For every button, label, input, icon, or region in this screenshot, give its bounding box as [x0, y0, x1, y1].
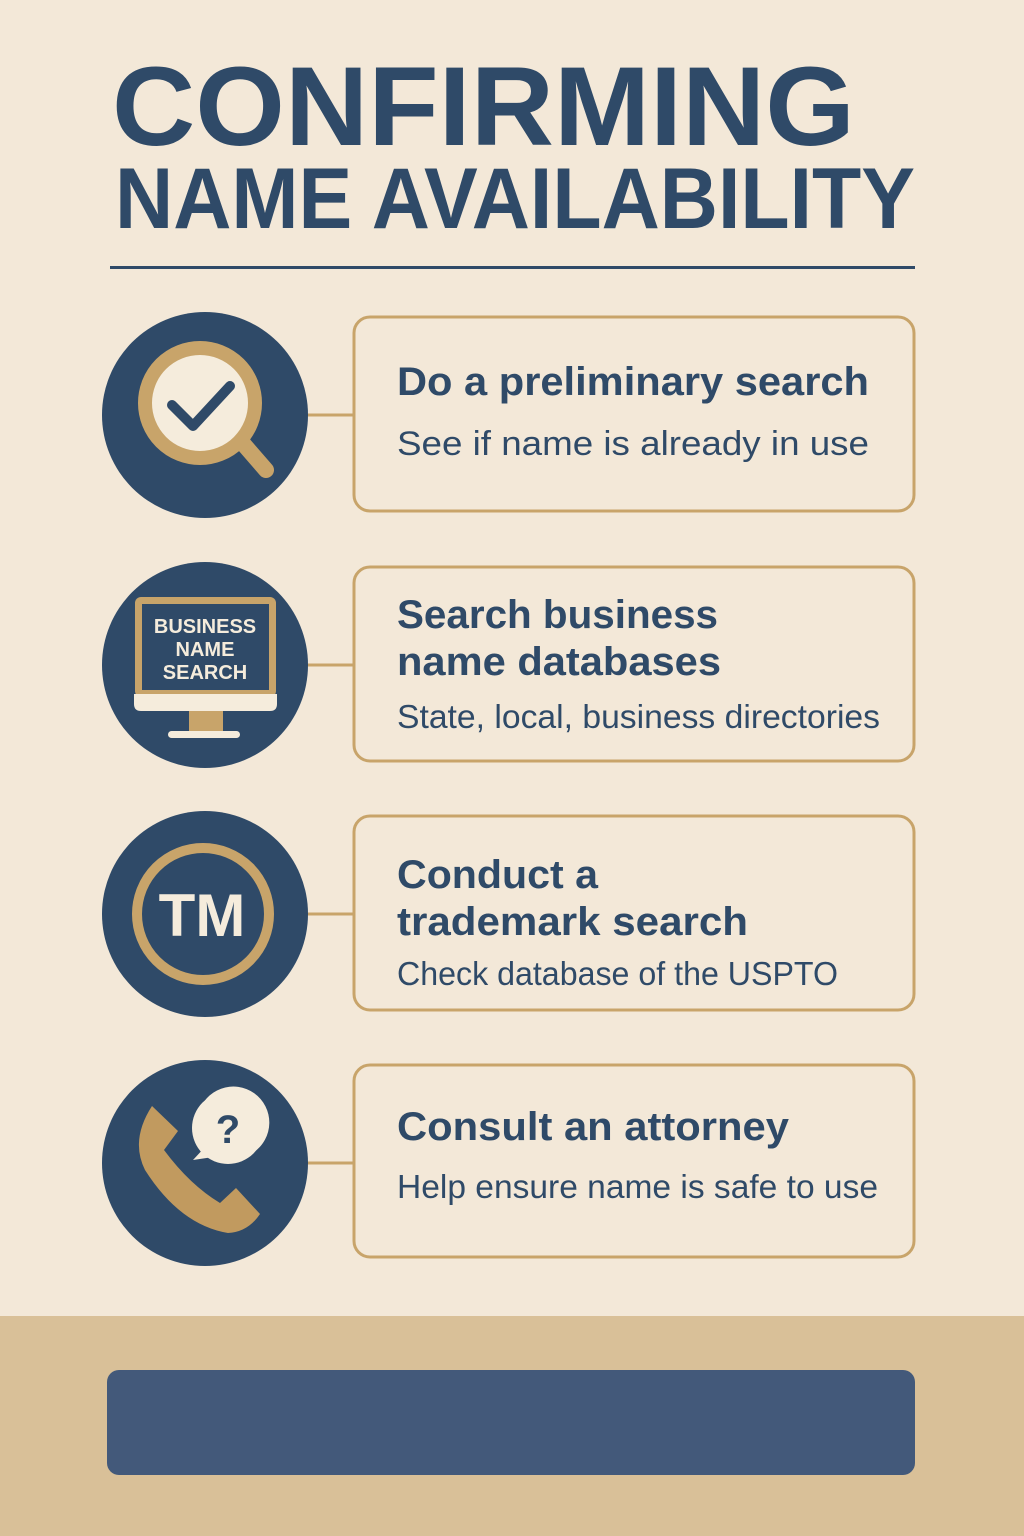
panel: trademark search: trademark search — [397, 900, 748, 944]
icon: phone with question: ? — [216, 1108, 240, 1152]
panel: trademark search: Conduct a — [397, 853, 599, 897]
panel: trademark search: Check database of the USPTO — [397, 955, 838, 992]
icon: monitor: SEARCH — [163, 662, 247, 684]
panel: trademark search — [354, 816, 914, 1010]
step 3: trademark — [102, 811, 914, 1017]
icon: phone with question — [102, 1060, 308, 1266]
panel: preliminary search: See if name is already in use — [397, 425, 869, 463]
title — [112, 44, 915, 247]
icon: TM: TM — [159, 882, 245, 949]
panel: consult attorney: Consult an attorney — [397, 1105, 790, 1149]
panel: consult attorney — [354, 1065, 914, 1257]
icon: monitor — [102, 562, 308, 768]
footer bar — [107, 1370, 915, 1475]
panel: preliminary search: Do a preliminary search — [397, 360, 869, 404]
panel: business databases: Search business — [397, 593, 718, 637]
title: NAME AVAILABILITY — [115, 151, 915, 247]
icon: TM — [102, 811, 308, 1017]
step 2: business databases — [102, 562, 914, 768]
panel: business databases — [354, 567, 914, 761]
panel: preliminary search — [354, 317, 914, 511]
panel: business databases: name databases — [397, 640, 721, 684]
step 4: attorney — [102, 1060, 914, 1266]
icon: monitor: NAME — [176, 639, 234, 661]
step 1: preliminary search — [102, 312, 914, 518]
icon: magnifier with check — [102, 312, 308, 518]
icon: monitor: BUSINESS — [154, 616, 256, 638]
panel: consult attorney: Help ensure name is safe to use — [397, 1168, 878, 1205]
title: CONFIRMING — [112, 44, 855, 169]
footer band — [0, 1316, 1024, 1536]
panel: business databases: State, local, business directories — [397, 698, 880, 735]
